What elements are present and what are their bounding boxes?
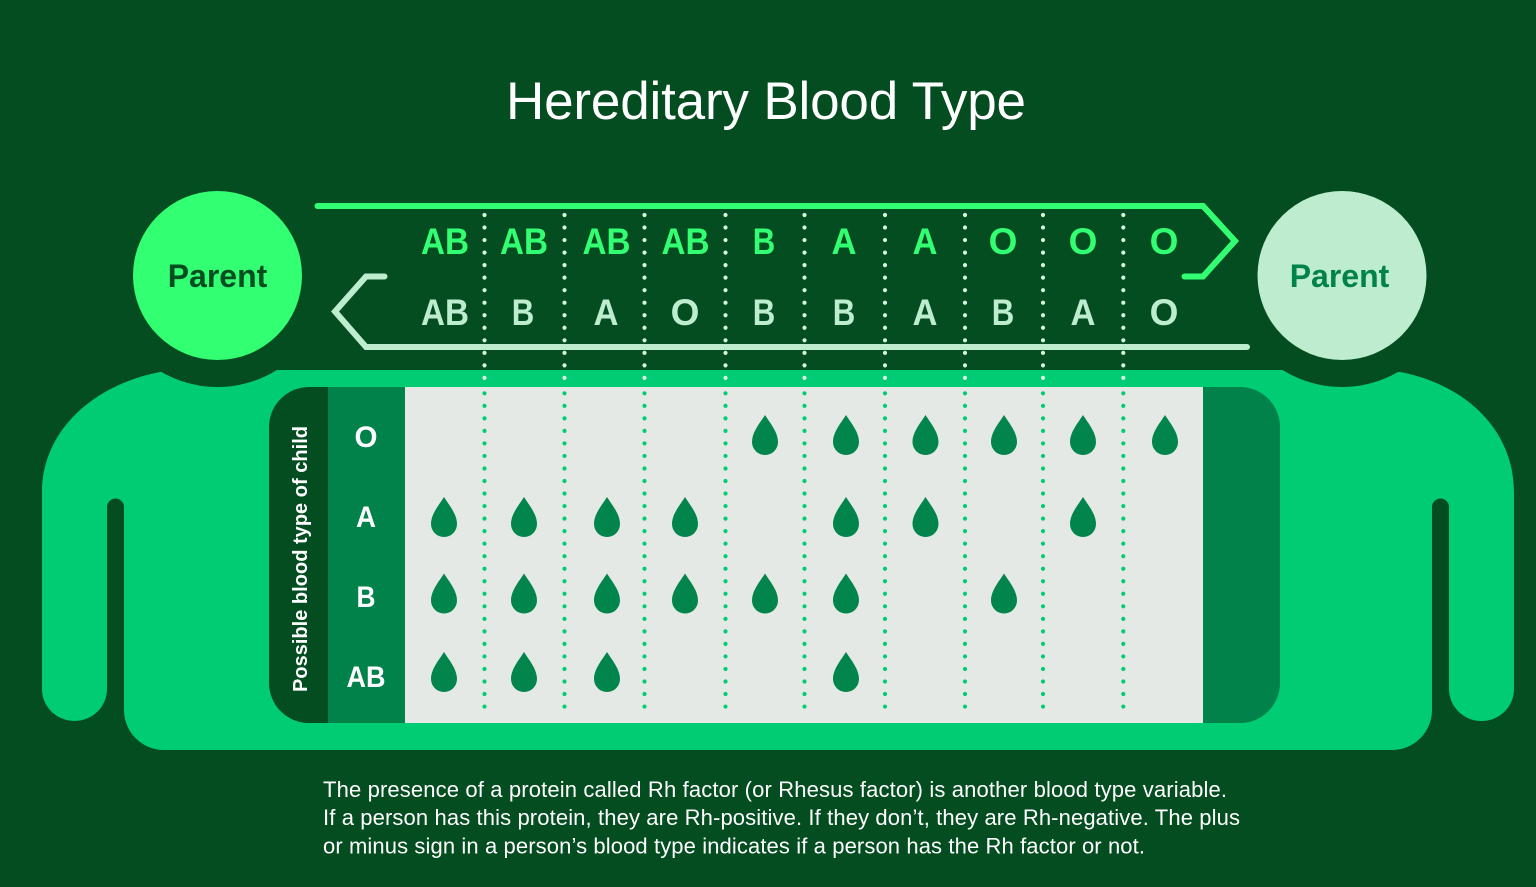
right parent blood types: A: [1070, 292, 1096, 333]
right parent blood types: O: [671, 292, 699, 333]
table right cap: [1203, 387, 1280, 723]
head: right parent: Parent: [1290, 258, 1390, 294]
table grid background: [405, 387, 1203, 723]
right parent blood types: AB: [421, 292, 469, 333]
left parent blood types: O: [1069, 221, 1097, 262]
left parent blood types: [421, 221, 1178, 262]
body silhouette: [42, 370, 1514, 750]
arrow: right parent to left: [335, 276, 1247, 347]
explanatory text: If a person has this protein, they are Rh-positive. If they don’t, they are Rh-negative. The plus: [323, 805, 1240, 830]
row labels: O: [354, 421, 378, 454]
head: right parent: [1258, 191, 1426, 360]
vertical axis label: Possible blood type of child: [290, 426, 312, 692]
title: Hereditary Blood Type: [506, 72, 1026, 131]
row labels: A: [356, 501, 376, 534]
neck cutouts: [106, 163, 1454, 387]
explanatory text: The presence of a protein called Rh factor (or Rhesus factor) is another blood type variable.: [323, 777, 1227, 802]
right parent blood types: O: [1150, 292, 1178, 333]
right parent blood types: B: [512, 292, 534, 333]
table label column: [269, 387, 328, 723]
head: left parent: Parent: [168, 258, 268, 294]
left parent blood types: O: [1150, 221, 1178, 262]
row labels: [346, 421, 386, 694]
row labels: AB: [346, 661, 386, 694]
left parent blood types: AB: [582, 221, 630, 262]
explanatory text: or minus sign in a person’s blood type indicates if a person has the Rh factor or not.: [323, 834, 1145, 858]
right parent blood types: B: [833, 292, 855, 333]
arrow: left parent to right: [318, 206, 1235, 276]
right parent blood types: [421, 292, 1178, 333]
left parent blood types: A: [912, 221, 938, 262]
explanatory text: [323, 777, 1240, 858]
right parent blood types: A: [912, 292, 938, 333]
left parent blood types: A: [832, 221, 856, 262]
table row header column: [328, 387, 405, 723]
left parent blood types: B: [753, 221, 775, 262]
row labels: B: [356, 581, 376, 614]
blood type table: [269, 387, 1280, 723]
left parent blood types: AB: [421, 221, 469, 262]
right parent blood types: B: [753, 292, 775, 333]
left parent blood types: AB: [662, 221, 710, 262]
right parent blood types: A: [594, 292, 618, 333]
head: left parent: [133, 191, 302, 360]
blood drop markers: [431, 415, 1178, 692]
dotted column dividers: [484, 215, 1123, 718]
right parent blood types: B: [992, 292, 1014, 333]
left parent blood types: AB: [500, 221, 548, 262]
left parent blood types: O: [989, 221, 1017, 262]
